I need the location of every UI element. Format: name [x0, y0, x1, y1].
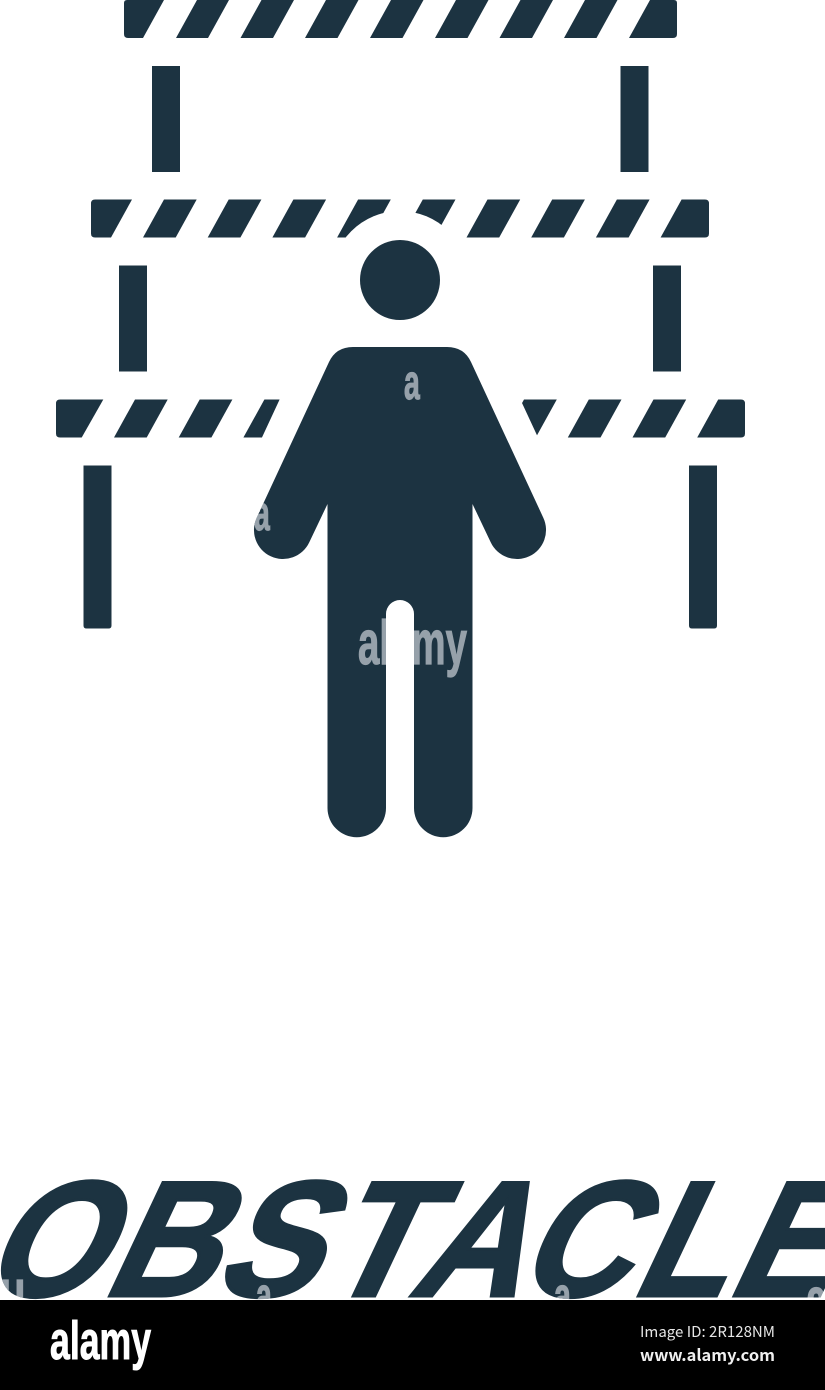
bottom barrier bar — [56, 400, 745, 438]
watermark marks — [0, 356, 825, 1333]
footer logo: alamy — [50, 1311, 151, 1371]
watermark marks: alamy — [358, 608, 467, 677]
middle barrier bar — [91, 200, 709, 238]
watermark marks: a — [254, 487, 270, 541]
watermark marks: u — [0, 1258, 26, 1325]
person figure — [254, 240, 546, 837]
watermark marks: a — [256, 1269, 272, 1323]
middle barrier posts — [119, 266, 681, 372]
website: www.alamy.com — [640, 1342, 775, 1366]
image id: Image ID: 2R128NM — [640, 1321, 775, 1342]
top barrier bar — [124, 0, 677, 38]
white halo around person — [254, 211, 546, 837]
footer bar — [0, 1300, 825, 1390]
watermark marks: a — [554, 1268, 571, 1323]
icon: obstacle barriers and person — [56, 0, 745, 837]
watermark marks: a — [404, 356, 420, 410]
bottom barrier posts — [84, 466, 717, 628]
top barrier posts — [152, 66, 648, 172]
